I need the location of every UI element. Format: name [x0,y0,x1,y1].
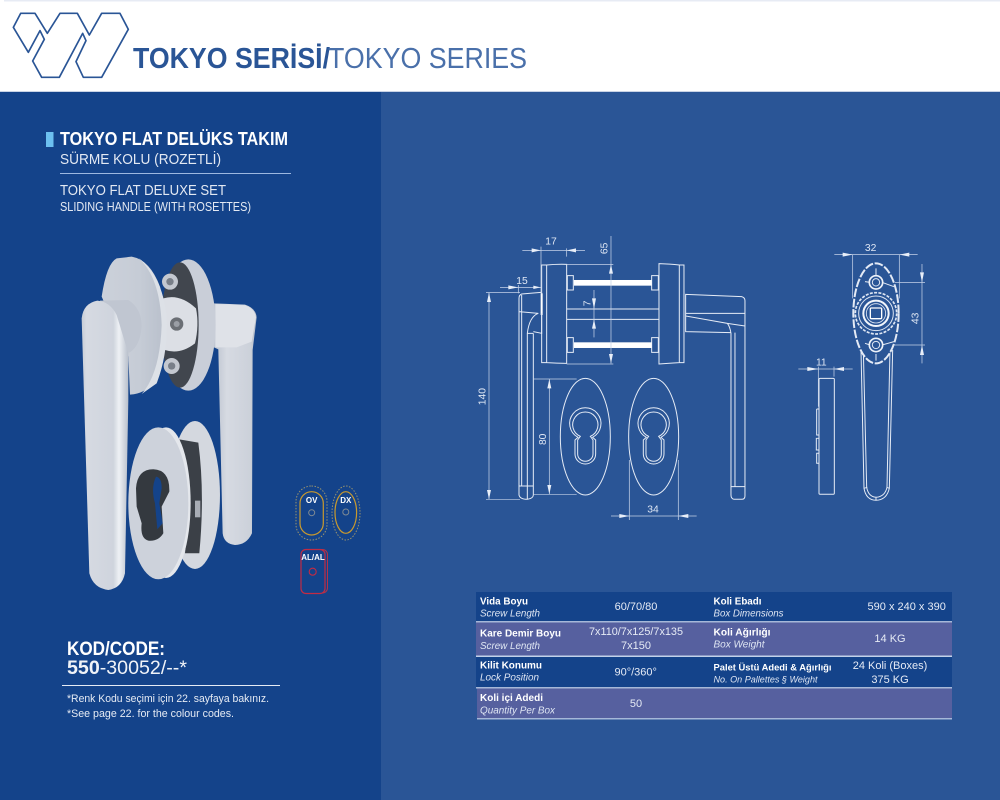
row: screw length: 60/70/80 [615,601,657,613]
dimension 11: 11 [816,357,827,368]
dimension 65 [567,236,613,364]
finish badge: DX: DX [340,496,352,505]
neck [100,300,142,353]
lower rear rosette [170,421,220,569]
dimension 80: 80 [538,433,549,445]
dimension 7 [582,290,596,337]
dimension 7: 7 [582,300,593,306]
product photo: handle set [82,257,257,590]
finish badge: OV: OV [306,496,318,505]
left handle profile [519,292,543,499]
product heading: SLIDING HANDLE (WITH ROSETTES) [60,200,251,214]
title [133,43,527,75]
row: square bar length: Kare Demir Boyu [480,628,561,640]
title: TOKYO SERİSİ/ [133,43,330,75]
row: square bar length: 7x110/7x125/7x135 [589,626,683,638]
dimension 11 [798,357,853,407]
row: screw length: Screw Length [480,608,540,620]
dimension 65: 65 [599,242,610,254]
escutcheon right [629,378,679,495]
row: box weight: Koli Ağırlığı [714,627,771,639]
product heading: TOKYO FLAT DELÜKS TAKIM [60,129,288,149]
dimension 15 [500,276,542,293]
dimension 15: 15 [516,276,528,287]
row: quantity per box: 50 [630,698,642,710]
row: box dimensions [714,596,946,620]
product heading: SÜRME KOLU (ROZETLİ) [60,150,221,168]
product heading [46,129,291,214]
row: box weight [714,627,906,651]
right rose profile [652,264,684,364]
header band [0,0,1000,92]
row: pallet quantity and weight: Palet Üstü Adedi & Ağırlığı [714,663,832,674]
row: quantity per box: Quantity Per Box [480,704,556,716]
right lever [214,303,257,545]
dimension 140 [477,293,520,499]
escutcheon left [560,378,610,495]
keyhole [136,469,169,541]
product heading: TOKYO FLAT DELUXE SET [60,182,226,199]
dimension 32 [834,243,918,298]
dimension 34 [611,460,697,520]
edge view of rosette [816,378,834,494]
row: square bar length: Screw Length [480,640,540,652]
product code: KOD/CODE: [67,638,165,660]
row: box dimensions: Koli Ebadı [714,596,762,608]
colour code note: *See page 22. for the colour codes. [67,708,234,720]
dimension 34: 34 [647,505,659,516]
specification table [476,592,952,720]
rear open rose [161,259,216,391]
colour code note: *Renk Kodu seçimi için 22. sayfaya bakınız. [67,693,269,705]
finish badge: AL/AL: AL/AL [301,553,325,562]
dimension 43 [893,264,925,363]
technical drawing: front and edge views [798,243,925,500]
row: lock position: Kilit Konumu [480,659,542,671]
table rows [476,592,952,720]
row: square bar length [480,626,683,652]
colour code note [67,693,269,720]
left lever [82,301,128,590]
row: lock position [480,659,657,684]
row: pallet quantity and weight: 24 Koli (Boxes) [853,660,927,672]
handle front view [853,263,899,500]
dimension 43: 43 [910,312,921,324]
row: pallet quantity and weight: 375 KG [871,674,909,686]
left rose profile [542,264,573,363]
row: square bar length: 7x150 [621,640,651,652]
dimension 17: 17 [545,236,557,247]
product code: 550-30052/--* [67,657,187,679]
row: box dimensions: 590 x 240 x 390 [868,601,946,613]
row: pallet quantity and weight [714,660,927,686]
panel: product [0,92,381,800]
dimension 32: 32 [865,243,877,254]
front rose [102,257,164,395]
dimension 140: 140 [477,388,488,405]
screws [567,280,659,348]
row: screw length: Vida Boyu [480,596,528,608]
right handle profile [686,294,745,499]
row: quantity per box: Koli içi Adedi [480,692,543,704]
icon: brand logo [13,13,128,77]
product code [62,638,280,686]
row: box weight: 14 KG [874,633,906,645]
technical drawing: side elevation [477,236,745,520]
colour options [296,486,360,594]
row: screw length [480,596,657,620]
dimension 80 [533,379,577,494]
row: pallet quantity and weight: No. On Pallettes § Weight [714,674,818,685]
row: quantity per box [480,692,642,716]
row: lock position: 90°/360° [614,667,657,679]
lower front rosette [141,427,191,578]
dimension 17 [522,236,585,293]
title: TOKYO SERIES [328,43,527,75]
row: box weight: Box Weight [714,639,766,651]
row: box dimensions: Box Dimensions [714,608,784,620]
row: lock position: Lock Position [480,672,539,684]
